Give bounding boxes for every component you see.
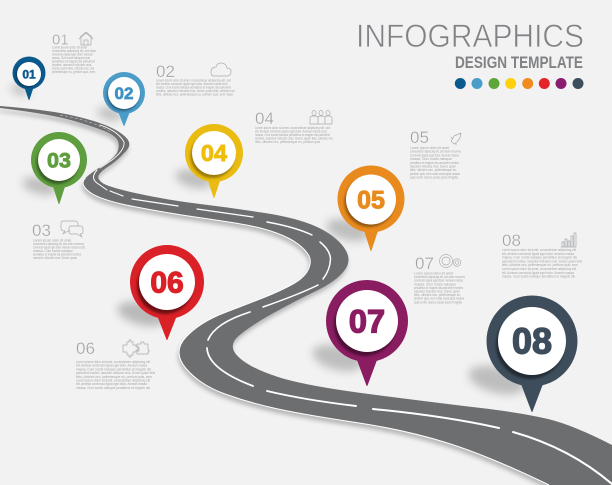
pin 04: 04 — [201, 140, 227, 166]
text block 04: Lorem ipsum dolor sit amet, consectetuer adipiscing elit, sed — [255, 126, 330, 130]
text block 07: quis enim donec pede justo fringilla — [414, 300, 462, 304]
heading: infographics: INFOGRAPHICS — [356, 18, 584, 54]
text block 07: 07 — [415, 254, 434, 273]
text block 04: massa. Cum sociis natoque penatibus et magnis dis parturient — [255, 133, 330, 137]
text block 01: 01 — [52, 32, 69, 48]
pin 08 — [466, 296, 578, 412]
icon: house — [79, 32, 93, 45]
text block 06 — [76, 339, 155, 390]
text block 05: felis, ultricies nec, pellentesque eu, — [410, 168, 457, 172]
pin 06 — [115, 245, 204, 340]
icon: speech bubbles — [61, 221, 83, 237]
text block 04 — [255, 109, 333, 144]
text block 03: 03 — [32, 221, 51, 240]
text block 07: pretium quis, sem nulla consequat massa — [414, 297, 464, 301]
text block 01: nonummy ligula eget dolor. Aenean — [52, 52, 93, 56]
pin 02 — [96, 72, 145, 126]
icon: rocket — [451, 133, 461, 145]
pin 01 — [9, 56, 46, 100]
text block 03: penatibus et magnis dis parturient montes — [33, 252, 81, 256]
text block 05: massa. Cum sociis natoque — [410, 157, 452, 161]
pin 05: 05 — [357, 186, 385, 214]
text block 05: commodo ligula eget dolor. Aenean massa — [410, 153, 459, 157]
icon: puzzle pieces — [123, 340, 149, 357]
text block 05: Lorem ipsum dolor sit amet — [410, 146, 449, 150]
text block 05: quis enim donec pede justo fringilla — [410, 176, 458, 180]
text block 01: pellentesque eu, pretium quis, sem — [52, 70, 95, 74]
road — [0, 106, 612, 485]
text block 08: 08 — [502, 231, 521, 250]
text block 06: 06 — [76, 339, 95, 358]
text block 04: montes, nascetur ridiculus mus. Donec quam felis, ultricies nec — [255, 136, 333, 140]
text block 03: Lorem ipsum dolor sit amet, — [33, 238, 72, 242]
pin 01: 01 — [22, 68, 36, 82]
text block 03: nascetur ridiculus mus. Donec quam — [33, 256, 77, 260]
text block 02: massa. Cum sociis natoque penatibus et magnis dis parturient — [156, 86, 231, 90]
text block 03 — [32, 221, 85, 260]
text block 06: massa. Cum sociis natoque penatibus et magnis dis — [76, 367, 151, 371]
text block 06: Lorem ipsum dolor sit amet, consectetuer adipiscing elit — [76, 378, 150, 382]
icon: cloud — [211, 63, 231, 76]
text block 06: elit. Aenean commodo ligula eget dolor. Aenean massa — [76, 382, 147, 386]
colour dots legend — [455, 78, 584, 89]
text block 07: Lorem ipsum dolor sit amet — [414, 272, 453, 276]
text block 01: Lorem ipsum dolor sit amet — [52, 46, 87, 50]
text block 05 — [410, 128, 461, 180]
text block 08: Lorem ipsum dolor sit amet, consectetuer adipiscing elit — [502, 267, 576, 271]
text block 02: 02 — [156, 62, 175, 81]
text block 02: elit. Aenean commodo ligula eget dolor. Aenean massa nunc — [156, 82, 228, 86]
text block 05: penatibus et magnis dis parturient montes — [410, 161, 459, 165]
pin 02: 02 — [115, 84, 133, 103]
text block 06: elit. Aenean commodo ligula eget dolor. Aenean massa — [76, 364, 147, 368]
title — [356, 18, 584, 72]
text block 04: 04 — [255, 109, 274, 128]
text block 01: consectetur adipiscing elit, sed diam — [52, 49, 96, 53]
text block 04: elit. Aenean commodo ligula eget dolor. Aenean massa nunc — [255, 130, 327, 134]
text block 08: elit. Aenean commodo ligula eget dolor. Aenean massa — [502, 271, 574, 275]
text block 07: consectetuer adipiscing elit, sed diam nonummy — [414, 275, 465, 279]
text block 06: Lorem ipsum dolor sit amet, consectetuer adipiscing elit — [76, 360, 150, 364]
pin 04 — [174, 124, 243, 198]
text block 05: 05 — [410, 128, 429, 147]
text block 08: massa. Cum sociis natoque penatibus et magnis dis — [502, 256, 577, 260]
pin 08: 08 — [512, 320, 552, 362]
text block 01 — [52, 32, 96, 74]
icon: gears — [440, 254, 461, 268]
text block 07: massa. Cum sociis natoque — [414, 282, 456, 286]
text block 08: parturient montes, nascetur ridiculus mus. Donec quam felis — [502, 259, 582, 263]
text block 02: Lorem ipsum dolor sit amet, consectetuer adipiscing elit, sed — [156, 78, 231, 82]
pin 05 — [324, 166, 404, 250]
text block 08 — [502, 231, 582, 279]
text block 08: elit. Aenean commodo ligula eget dolor. Aenean massa — [502, 252, 574, 256]
text block 08: Lorem ipsum dolor sit amet, consectetuer adipiscing elit — [502, 248, 576, 252]
pin 07 — [310, 280, 408, 386]
subheading: design template: DESIGN TEMPLATE — [455, 54, 583, 72]
text block 06: felis, ultricies nec, pellentesque eu, pretium quis, sem — [76, 375, 152, 379]
text block 07: penatibus et magnis dis parturient montes — [414, 286, 463, 290]
text block 01: massa. Cum sociis natoque penat — [52, 56, 90, 60]
text block 05: pretium quis, sem nulla consequat massa — [410, 172, 460, 176]
text block 01: penatibus et magnis dis parturient — [52, 60, 95, 64]
text block 02: montes, nascetur ridiculus mus. Donec quam felis, ultricies nec — [156, 89, 235, 93]
text block 02 — [156, 62, 235, 96]
text block 02: felis, ultricies nec, pellentesque eu, pretium quis, sem mass — [156, 92, 233, 96]
text block 05: consectetuer adipiscing elit, sed diam nonummy — [410, 150, 461, 154]
pin 03 — [21, 132, 87, 204]
text block 07: commodo ligula eget dolor. Aenean massa — [414, 279, 463, 283]
text block 07: nascetur ridiculus mus. Donec quam — [414, 290, 460, 294]
text block 06: massa. Cum sociis natoque penatibus et magnis dis — [76, 386, 150, 390]
text block 07: felis, ultricies nec, pellentesque eu, — [414, 293, 461, 297]
text block 08: felis, ultricies nec, pellentesque eu, pretium quis, sem — [502, 263, 578, 267]
pin 06: 06 — [150, 266, 184, 300]
pin 03: 03 — [47, 148, 71, 172]
text block 01: Donec quam felis, ultricies nec, dui — [52, 66, 94, 70]
text block 06: parturient montes, nascetur ridiculus mus. Donec quam felis — [76, 371, 155, 375]
text block 08: massa. Cum sociis natoque penatibus et magnis dis — [502, 275, 575, 279]
text block 03: massa. Cum sociis natoque — [33, 249, 73, 253]
icon: people — [310, 110, 332, 124]
text block 03: commodo ligula eget dolor. Aenean massa sociis — [33, 246, 85, 250]
text block 04: felis, ultricies nec, pellentesque eu, pretium quis — [255, 140, 320, 144]
text block 05: nascetur ridiculus mus. Donec quam — [410, 164, 456, 168]
icon: bar chart — [561, 233, 576, 247]
text block 07 — [414, 254, 465, 304]
text block 03: consectetuer adipiscing elit, sed diam nonummy — [33, 242, 84, 246]
text block 01: montes, nascetur ridiculus mus. — [52, 63, 92, 67]
pin 07: 07 — [349, 304, 385, 340]
